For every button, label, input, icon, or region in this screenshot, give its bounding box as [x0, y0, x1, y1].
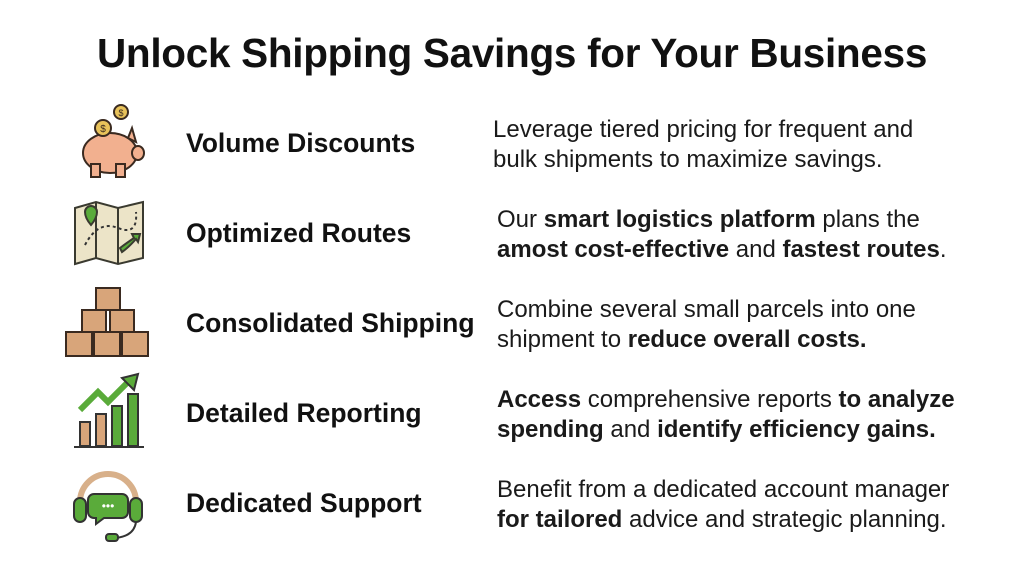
description: bulk shipments to maximize savings.: [493, 146, 882, 173]
description: spending and identify efficiency gains.: [497, 416, 936, 443]
icon: map: [74, 200, 144, 266]
icon: piggy bank: $: [118, 108, 124, 118]
description: Our smart logistics platform plans the: [497, 206, 920, 233]
title: Unlock Shipping Savings for Your Business: [97, 30, 927, 76]
icon: piggy bank: [82, 104, 145, 178]
row: dedicated support: [73, 471, 949, 542]
description: [497, 296, 916, 353]
row: consolidated shipping: [65, 287, 916, 357]
icon: headset: [73, 471, 143, 542]
row: detailed reporting: [74, 372, 955, 448]
description: Benefit from a dedicated account manager: [497, 476, 949, 503]
icon: chart: [74, 372, 144, 448]
heading: Detailed Reporting: [186, 398, 422, 428]
description: [497, 386, 955, 443]
row: volume discounts: [82, 104, 913, 178]
description: for tailored advice and strategic planning.: [497, 506, 947, 533]
description: Leverage tiered pricing for frequent and: [493, 116, 913, 143]
description: [497, 206, 947, 263]
heading: Consolidated Shipping: [186, 308, 475, 338]
description: [493, 116, 913, 173]
description: amost cost-effective and fastest routes.: [497, 236, 947, 263]
icon: piggy bank: $: [100, 124, 106, 135]
heading: Optimized Routes: [186, 218, 411, 248]
description: shipment to reduce overall costs.: [497, 326, 867, 353]
icon: boxes: [65, 287, 149, 357]
icon: headset: •••: [102, 499, 114, 513]
heading: Volume Discounts: [186, 128, 415, 158]
row: optimized routes: [74, 200, 947, 266]
description: Combine several small parcels into one: [497, 296, 916, 323]
description: [497, 476, 949, 533]
heading: Dedicated Support: [186, 488, 422, 518]
description: Access comprehensive reports to analyze: [497, 386, 955, 413]
